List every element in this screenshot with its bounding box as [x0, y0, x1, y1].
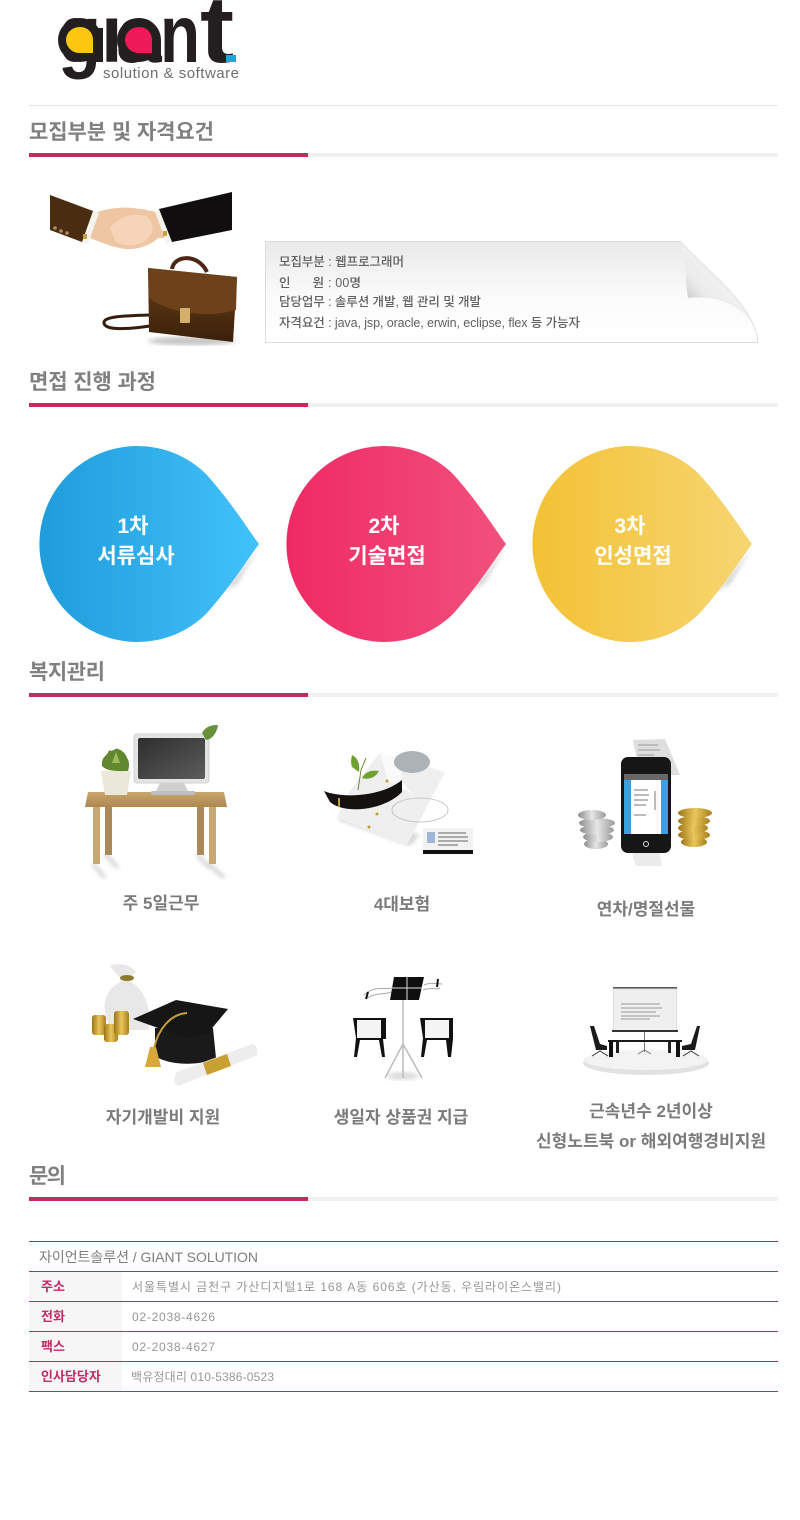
label: 생일자 상품권 지급: 생일자 상품권 지급 — [334, 1108, 468, 1127]
logo: giant solution & software — [58, 0, 239, 82]
row: address: 서울특별시 금천구 가산디지털1로 168 A동 606호 (가산동, 우림라이온스밸리) — [132, 1279, 561, 1294]
row: phone: 02-2038-4626 — [132, 1310, 215, 1324]
icon: music stand and chairs — [353, 977, 453, 1080]
row: fax: 팩스 — [41, 1339, 65, 1354]
label: 주 5일근무: 주 5일근무 — [123, 894, 199, 913]
step 2: 기술면접: 기술면접 — [348, 545, 426, 568]
requirement text: 자격요건 : java, jsp, oracle, erwin, eclipse, flex 등 가능자 — [279, 316, 580, 330]
row: fax — [41, 1339, 215, 1354]
label: 4대보험: 4대보험 — [374, 895, 430, 914]
label: 근속년수 2년이상: 근속년수 2년이상 — [589, 1102, 713, 1121]
row: phone: 전화 — [41, 1309, 65, 1324]
requirement text: 인 원 : 00명 — [279, 276, 361, 290]
heading: 면접 진행 과정: 면접 진행 과정 — [29, 371, 156, 394]
icon: desk with monitor — [85, 725, 227, 878]
step 3: 인성면접 — [532, 446, 752, 642]
row: address: 주소 — [41, 1279, 65, 1294]
icon: phone with coins — [578, 739, 712, 866]
step 2: 기술면접 — [286, 446, 506, 642]
icon: graduation cap, money bag and scroll — [92, 964, 257, 1086]
row: HR contact: 인사담당자 — [41, 1369, 101, 1384]
requirement text: 모집부분 : 웹프로그래머 — [279, 255, 404, 269]
step 1: 서류심사: 서류심사 — [97, 545, 175, 568]
heading: 문의: 문의 — [29, 1165, 66, 1188]
step 3: 인성면접: 인성면접 — [594, 545, 672, 568]
requirement text — [279, 255, 580, 330]
icon: handshake — [50, 192, 232, 249]
heading: 복지관리: 복지관리 — [29, 661, 105, 684]
row: fax: 02-2038-4627 — [132, 1340, 215, 1354]
step 1: 서류심사 — [39, 446, 259, 642]
company name: 자이언트솔루션 / GIANT SOLUTION — [39, 1249, 258, 1265]
panel: job requirements note — [266, 240, 759, 343]
label: 연차/명절선물: 연차/명절선물 — [597, 900, 695, 919]
requirement text: 담당업무 : 솔루션 개발, 웹 관리 및 개발 — [279, 295, 481, 309]
icon: presentation screen and table — [583, 987, 709, 1075]
logo: giant solution & software: solution & software — [103, 65, 239, 82]
icon: briefcase — [104, 258, 237, 345]
step 2: 기술면접: 2차 — [368, 515, 400, 538]
row: phone — [41, 1309, 215, 1324]
contact table — [29, 1241, 778, 1392]
icon: shirt with ID card — [324, 751, 473, 854]
heading: 모집부분 및 자격요건: 모집부분 및 자격요건 — [29, 121, 214, 144]
label: 자기개발비 지원: 자기개발비 지원 — [106, 1108, 220, 1127]
row: HR contact — [41, 1369, 274, 1384]
row: HR contact: 백유정대리 010-5386-0523 — [131, 1370, 274, 1384]
label: 신형노트북 or 해외여행경비지원: 신형노트북 or 해외여행경비지원 — [536, 1132, 766, 1151]
step 3: 인성면접: 3차 — [614, 515, 646, 538]
step 1: 서류심사: 1차 — [118, 515, 148, 538]
